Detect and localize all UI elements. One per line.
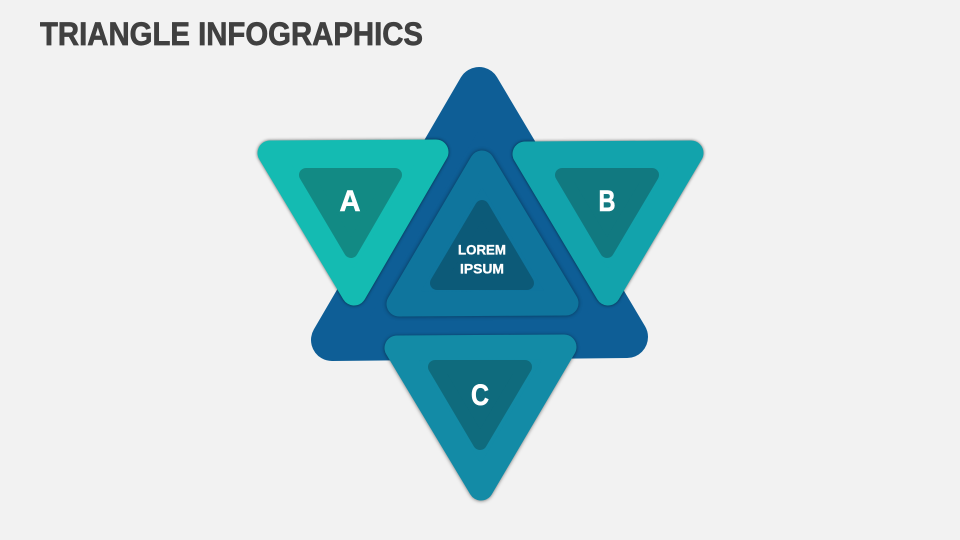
center inner triangle (437, 207, 527, 283)
panel: B (525, 153, 691, 293)
center label: LOREM (458, 242, 506, 258)
triangle A inner (306, 175, 395, 251)
label C: C (471, 379, 489, 412)
panel: center triangle (399, 163, 566, 304)
label A: A (340, 185, 360, 218)
title: TRIANGLE INFOGRAPHICS (40, 16, 423, 52)
panel: A (270, 152, 436, 293)
triangle A outer (270, 152, 436, 293)
triangle C outer (397, 347, 564, 488)
large background triangle (332, 88, 627, 340)
center label: IPSUM (460, 260, 504, 276)
triangle C inner (435, 367, 525, 443)
triangle B inner (562, 175, 652, 251)
center outer triangle (399, 163, 566, 304)
panel: C (397, 347, 564, 488)
label B: B (598, 185, 616, 218)
triangle B outer (525, 153, 691, 293)
center label (458, 242, 506, 276)
